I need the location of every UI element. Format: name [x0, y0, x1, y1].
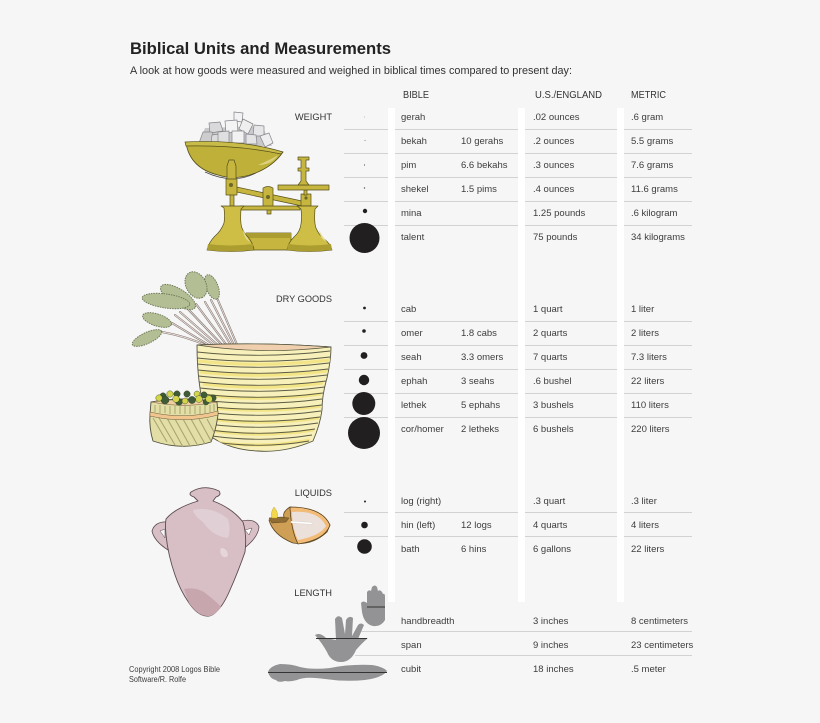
wheat heads [130, 268, 222, 350]
dot: cor/homer [348, 417, 380, 449]
row: talent: 75 pounds [533, 232, 578, 243]
base and feet [246, 233, 291, 250]
dot: hin [361, 522, 368, 528]
title: Biblical Units and Measurements [130, 39, 391, 58]
row: cor/homer: 6 bushels [533, 424, 574, 435]
row: cab: cab [401, 304, 416, 315]
row: lethek: 3 bushels [533, 400, 574, 411]
row: hin: 12 logs [461, 520, 492, 531]
row: pim: pim [401, 160, 416, 171]
dot: omer [362, 329, 366, 333]
copyright: Copyright 2008 Logos Bible [129, 665, 221, 674]
row: log: .3 liter [631, 496, 657, 507]
row: span: span [401, 640, 422, 651]
row: omer: omer [401, 328, 423, 339]
section: liquids [295, 488, 665, 555]
row: gerah: .02 ounces [533, 112, 580, 123]
column headers [403, 90, 666, 101]
row: bekah [401, 136, 673, 147]
row: shekel [401, 184, 678, 195]
row: span: 23 centimeters [631, 640, 694, 651]
row: omer: 1.8 cabs [461, 328, 497, 339]
section: weight [295, 112, 685, 253]
dot: log [364, 500, 366, 502]
row: handbreadth: handbreadth [401, 616, 454, 627]
row: bekah: 5.5 grams [631, 136, 673, 147]
dot: pim [364, 164, 365, 166]
subtitle: A look at how goods were measured and weighed in biblical times compared to present day: [130, 65, 572, 77]
row: gerah: gerah [401, 112, 425, 123]
row: lethek: 5 ephahs [461, 400, 500, 411]
row: hin: 4 liters [631, 520, 659, 531]
dot: mina [363, 209, 367, 213]
wheat stems [162, 298, 238, 347]
row: bath: 6 gallons [533, 544, 571, 555]
row: cor/homer: 220 liters [631, 424, 670, 435]
row: pim: .3 ounces [533, 160, 574, 171]
label: weight: WEIGHT [295, 112, 332, 122]
row: cor/homer [401, 424, 670, 435]
row: bath: 6 hins [461, 544, 487, 555]
flame [271, 507, 278, 518]
grain pile [156, 391, 216, 405]
dot: talent [350, 223, 380, 253]
row: shekel: .4 ounces [533, 184, 574, 195]
row: talent [401, 232, 685, 243]
row: pim [401, 160, 673, 171]
dot: gerah [363, 116, 366, 118]
row: seah: seah [401, 352, 422, 363]
row: cab: 1 liter [631, 304, 654, 315]
row: mina: mina [401, 208, 422, 219]
row: bath [401, 544, 665, 555]
row: shekel: 11.6 grams [631, 184, 678, 195]
row: span [401, 640, 694, 651]
infographic: biblical units and measurements [129, 42, 693, 682]
row: ephah: .6 bushel [533, 376, 572, 387]
header: bible: BIBLE [403, 90, 429, 101]
row: talent: talent [401, 232, 425, 243]
illustration: balance scale with sugar cubes [185, 112, 332, 252]
icon: hand measuring a handbreadth [361, 586, 385, 626]
row: lethek [401, 400, 669, 411]
row: lethek: 110 liters [631, 400, 669, 411]
row: log: log (right) [401, 496, 441, 507]
row: mina [401, 208, 678, 219]
row: cab [401, 304, 654, 315]
scale beam and pivots [226, 157, 329, 214]
row: log: .3 quart [533, 496, 566, 507]
row: hin: 4 quarts [533, 520, 568, 531]
row: cor/homer: 2 letheks [461, 424, 499, 435]
row: gerah: .6 gram [631, 112, 663, 123]
row: omer: 2 quarts [533, 328, 568, 339]
header: metric: METRIC [631, 90, 666, 101]
row: bekah: 10 gerahs [461, 136, 504, 147]
row: shekel: shekel [401, 184, 428, 195]
row: pim: 7.6 grams [631, 160, 673, 171]
row: cubit: .5 meter [631, 664, 666, 675]
row: cubit: cubit [401, 664, 421, 675]
row: handbreadth: 8 centimeters [631, 616, 688, 627]
dot: bath [357, 539, 372, 554]
row: bath: 22 liters [631, 544, 665, 555]
illustration: clay jar [152, 488, 259, 616]
row: talent: 34 kilograms [631, 232, 685, 243]
section: dry goods [276, 294, 670, 449]
row: cor/homer: cor/homer [401, 424, 444, 435]
label: length: LENGTH [294, 588, 332, 598]
row: bekah: .2 ounces [533, 136, 574, 147]
row: log [401, 496, 657, 507]
row: ephah: 3 seahs [461, 376, 495, 387]
row: ephah: ephah [401, 376, 427, 387]
sugar cubes [198, 112, 273, 147]
row: omer [401, 328, 659, 339]
illustration: oil lamp [269, 507, 330, 544]
row: handbreadth [401, 616, 688, 627]
row: mina: 1.25 pounds [533, 208, 586, 219]
row: shekel: 1.5 pims [461, 184, 497, 195]
dot: shekel [364, 187, 365, 189]
pan [186, 143, 283, 178]
large basket [197, 344, 331, 451]
row: omer: 2 liters [631, 328, 659, 339]
label: liquids: LIQUIDS [295, 488, 332, 498]
icon: hand measuring a span [315, 616, 368, 662]
icon: forearm measuring a cubit [268, 664, 387, 682]
illustration: grain stalks, basket and bowl [130, 268, 331, 451]
row: cab: 1 quart [533, 304, 563, 315]
row: seah: 3.3 omers [461, 352, 503, 363]
dot: bekah [364, 140, 366, 141]
row: ephah [401, 376, 665, 387]
row: gerah [401, 112, 663, 123]
header: U.S./England: U.S./ENGLAND [535, 90, 602, 101]
row: hin: hin (left) [401, 520, 435, 531]
copyright [129, 665, 221, 684]
row: seah: 7.3 liters [631, 352, 667, 363]
row: seah [401, 352, 667, 363]
row: mina: .6 kilogram [631, 208, 678, 219]
dot: seah [361, 352, 367, 359]
row: bekah: bekah [401, 136, 427, 147]
row: bath: bath [401, 544, 420, 555]
row: hin [401, 520, 659, 531]
small bowl [150, 399, 218, 447]
row: span: 9 inches [533, 640, 569, 651]
dot: lethek [352, 392, 375, 415]
row: cubit: 18 inches [533, 664, 574, 675]
row: ephah: 22 liters [631, 376, 665, 387]
row: handbreadth: 3 inches [533, 616, 569, 627]
dot: ephah [359, 375, 369, 385]
row: cubit [401, 664, 666, 675]
row: pim: 6.6 bekahs [461, 160, 508, 171]
label: dry goods: DRY GOODS [276, 294, 332, 304]
dot: cab [363, 307, 366, 309]
copyright: Software/R. Rolfe [129, 675, 186, 684]
section: length [268, 586, 694, 682]
row: seah: 7 quarts [533, 352, 568, 363]
row: lethek: lethek [401, 400, 427, 411]
